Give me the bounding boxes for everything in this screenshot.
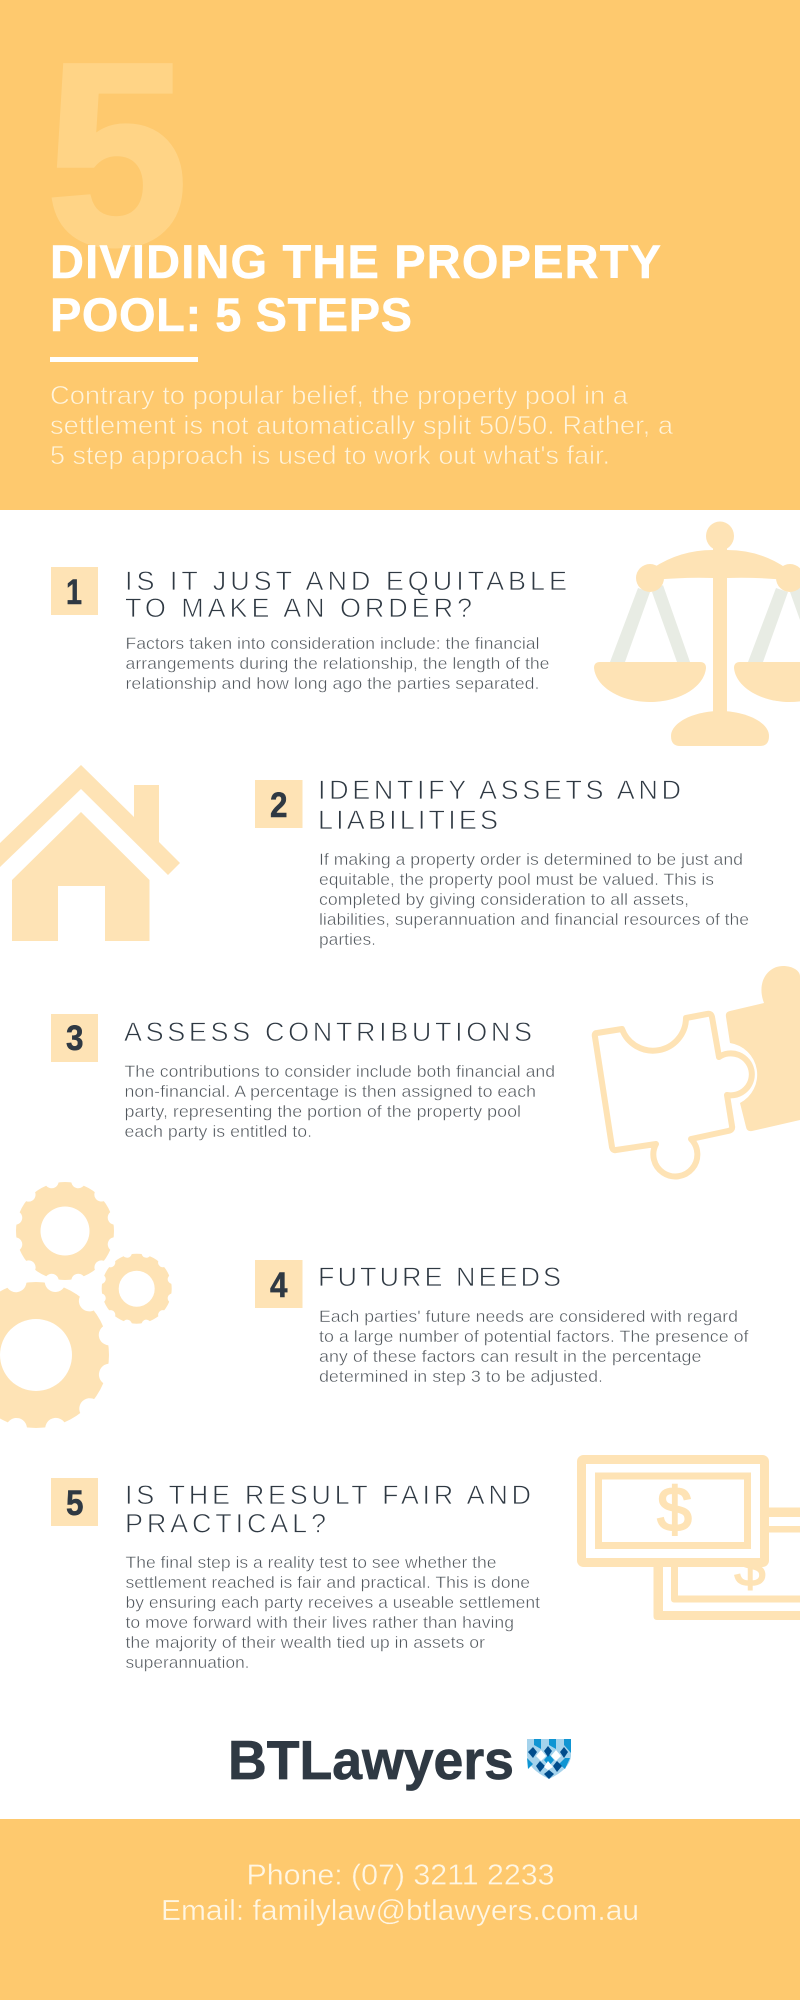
title [50,235,661,341]
body: step 5: by ensuring each party receives a useable settlement [126,1594,540,1612]
front banknote [582,1460,764,1562]
body: step 2: liabilities, superannuation and financial resources of the [319,911,749,929]
badge: 1: 1 [66,573,82,612]
icon: puzzle pieces [595,966,800,1176]
badge: 2 [255,780,302,828]
body: step 5: settlement reached is fair and practical. This is done [126,1574,530,1592]
body: step 5 [126,1554,540,1672]
front banknote: $ [657,1476,692,1545]
back banknote: $ [734,1535,766,1598]
panel: step 3 [51,1014,555,1141]
panel: footer contact [0,1819,800,2000]
body: step 3 [124,1063,555,1141]
body: step 1: arrangements during the relationship, the length of the [126,655,550,673]
panel: step 5 [51,1478,540,1672]
body: step 5: to move forward with their lives rather than having [126,1614,514,1632]
title underline [50,357,198,362]
body: step 5: superannuation. [126,1654,250,1672]
large gear [0,1262,129,1448]
badge: 2: 2 [270,786,288,825]
body: step 4: Each parties' future needs are considered with regard [319,1308,738,1326]
body: step 4: determined in step 3 to be adjusted. [319,1368,603,1386]
body: step 3: The contributions to consider include both financial and [124,1063,555,1081]
body: step 5: the majority of their wealth tied up in assets or [126,1634,486,1652]
heading: step 5: IS THE RESULT FAIR AND [125,1480,531,1510]
heading: step 4: FUTURE NEEDS [318,1262,561,1292]
panel: step 2 [255,775,749,949]
intro text: Contrary to popular belief, the property pool in a [50,380,629,410]
heading: step 2: IDENTIFY ASSETS AND [318,775,681,805]
badge: 4: 4 [270,1266,288,1305]
body: step 4 [319,1308,749,1386]
body: step 4: to a large number of potential factors. The presence of [319,1328,749,1346]
heading: step 3: ASSESS CONTRIBUTIONS [124,1017,532,1047]
heading: step 2 [318,775,681,835]
body: step 5: The final step is a reality test to see whether the [126,1554,496,1572]
decorative large number 5: 5 [46,10,188,300]
body: step 2: completed by giving consideration to all assets, [319,891,689,909]
phone: Phone: (07) 3211 2233 [246,1860,554,1892]
intro text: 5 step approach is used to work out what's fair. [50,440,610,470]
heading: step 1: IS IT JUST AND EQUITABLE [125,566,567,596]
title: DIVIDING THE PROPERTY [50,235,661,288]
badge: 3: 3 [66,1019,84,1058]
logo wordmark: BTLawyers [228,1729,514,1791]
back banknote [654,1508,800,1620]
panel: step 1 [51,566,567,693]
panel: header [0,0,800,510]
heading: step 5: PRACTICAL? [125,1508,326,1538]
badge: 5 [51,1478,98,1526]
body: step 3: each party is entitled to. [124,1123,312,1141]
heading: step 1: TO MAKE AN ORDER? [125,593,472,623]
panel: step 4 [255,1260,749,1386]
body: step 1: relationship and how long ago the parties separated. [126,675,540,693]
badge: 5: 5 [66,1484,84,1523]
title: POOL: 5 STEPS [50,288,412,341]
intro text [50,380,674,470]
icon: house [0,765,180,941]
icon: scales of justice [594,522,800,746]
body: step 4: any of these factors can result in the percentage [319,1348,702,1366]
icon: banknotes [582,1460,800,1620]
body: step 1 [126,635,550,693]
icon: gears [0,1168,182,1448]
body: step 2: equitable, the property pool must be valued. This is [319,871,714,889]
heading: step 2: LIABILITIES [318,805,498,835]
logo shield [527,1739,571,1779]
body: step 1: Factors taken into consideration include: the financial [126,635,540,653]
email: Email: familylaw@btlawyers.com.au [161,1895,639,1927]
logo: BT Lawyers [228,1729,571,1791]
body: step 3: non-financial. A percentage is then assigned to each [124,1083,536,1101]
body: step 2 [319,851,749,949]
heading: step 5 [125,1480,531,1538]
medium gear [2,1168,128,1294]
badge: 3 [51,1014,98,1062]
body: step 3: party, representing the portion of the property pool [124,1103,521,1121]
body: step 2: If making a property order is determined to be just and [319,851,743,869]
badge: 1 [51,567,98,615]
intro text: settlement is not automatically split 50/50. Rather, a [50,410,674,440]
small gear [91,1243,182,1334]
badge: 4 [255,1260,302,1308]
heading: step 1 [125,566,567,623]
body: step 2: parties. [319,931,376,949]
